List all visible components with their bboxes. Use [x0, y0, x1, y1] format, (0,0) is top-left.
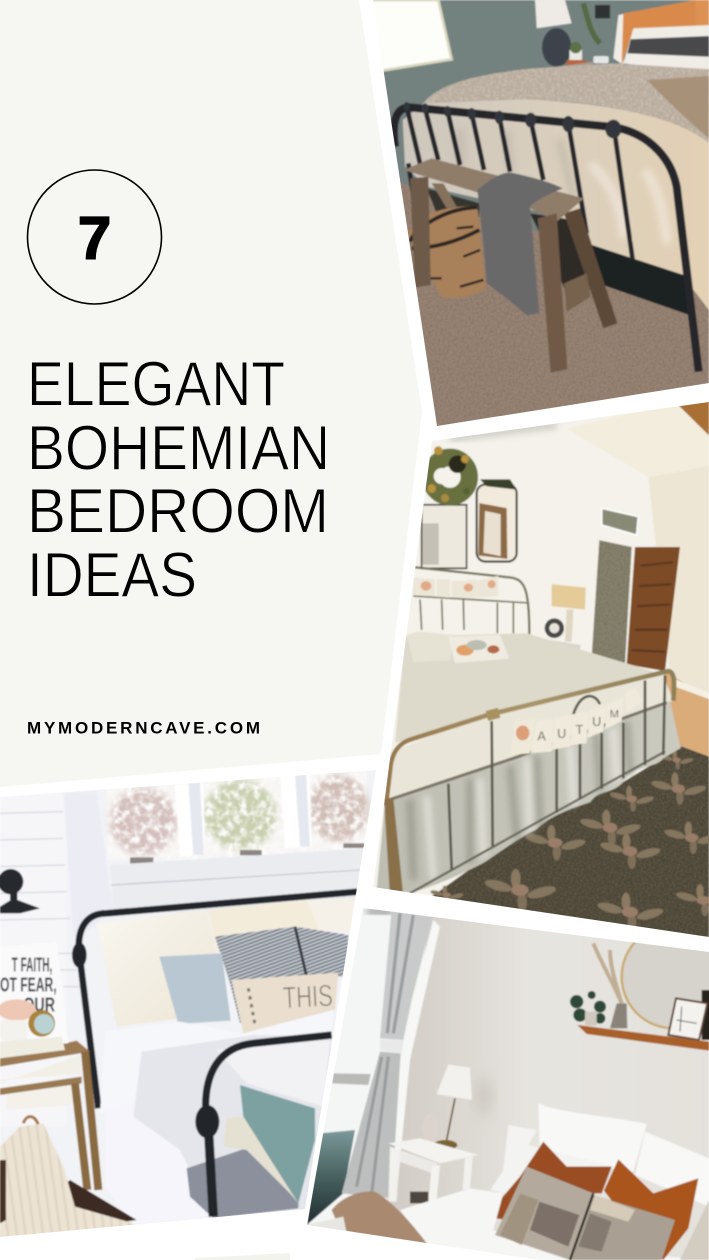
website label: MYMODERNCAVE.COM	[27, 718, 260, 738]
photo: white farmhouse bedroom with black iron bed	[0, 770, 376, 1237]
dark frame panel	[591, 244, 689, 315]
iron footboard	[206, 1035, 332, 1217]
wall sign: OUR	[23, 994, 55, 1017]
title: ELEGANT	[27, 350, 285, 420]
flowers and clock	[0, 999, 65, 1058]
patchwork pillows	[495, 1167, 675, 1260]
quilt	[390, 675, 673, 799]
autumn cards: U	[592, 714, 601, 729]
autumn cards: U	[557, 726, 566, 741]
window with trees	[107, 770, 368, 863]
floor	[67, 1179, 137, 1222]
photo: neutral bedroom with rust and patchwork pillows	[300, 900, 709, 1260]
iron footboard	[394, 107, 699, 372]
wall	[383, 913, 709, 1260]
tan blanket	[332, 1191, 432, 1250]
dried stems and vase	[593, 943, 627, 1028]
bed top	[395, 633, 663, 743]
wall sign: T FAITH,	[12, 954, 52, 977]
plant	[570, 991, 606, 1026]
number badge: 7	[78, 204, 111, 272]
window sill and chair	[307, 1073, 371, 1225]
rug	[427, 746, 709, 937]
photo: brass bed with autumn banner	[370, 400, 709, 937]
wall sconce	[0, 869, 40, 913]
bed skirt	[377, 701, 681, 895]
number badge	[28, 170, 162, 304]
rust pillows	[486, 1142, 698, 1260]
title: BOHEMIAN	[27, 414, 330, 484]
pumpkin banner	[413, 576, 498, 598]
bed linens	[100, 1010, 333, 1225]
headboard	[413, 567, 529, 635]
autumn cards: A	[537, 729, 546, 744]
throw blanket on bed	[422, 63, 709, 143]
wooden shelf	[577, 1025, 709, 1051]
title: IDEAS	[27, 540, 197, 610]
mirrors	[422, 484, 517, 568]
white bedding	[400, 1188, 567, 1260]
autumn cards: M	[610, 709, 619, 721]
floor	[663, 670, 709, 758]
ceiling and right wall	[450, 400, 709, 697]
shiplap wall	[0, 811, 80, 988]
knit blanket in basket	[0, 1117, 133, 1238]
title: BEDROOM	[27, 476, 329, 546]
pillows	[613, 0, 709, 70]
autumn cards	[516, 710, 623, 755]
wall sign	[0, 956, 69, 1045]
table lamp	[423, 1064, 492, 1150]
white nightstand	[388, 1138, 478, 1203]
wall sign: OT FEAR,	[0, 974, 57, 997]
pillows	[407, 632, 509, 663]
lamp and nightstand	[545, 584, 586, 654]
wreath	[427, 446, 470, 502]
duvet	[403, 99, 709, 310]
nightstand	[0, 1041, 98, 1190]
pillows: THIS	[282, 979, 334, 1015]
wooden bench	[403, 158, 617, 373]
brass footboard	[384, 671, 674, 896]
carpet	[393, 180, 709, 430]
pillows	[97, 898, 355, 1033]
sliver of next photo at bottom edge	[195, 1253, 290, 1260]
table lamp	[535, 0, 610, 67]
wall mirror	[622, 925, 709, 1028]
white headboard and pillows	[490, 1103, 709, 1260]
photo: black iron bed with wooden bench	[360, 0, 709, 430]
grey throw on bench	[477, 173, 563, 315]
panel: title background	[0, 0, 422, 787]
picture frames	[668, 990, 709, 1040]
doorway	[592, 508, 680, 671]
autumn cards: T	[575, 722, 583, 737]
headboard	[79, 892, 358, 1108]
basket	[408, 206, 486, 298]
window sill	[111, 849, 363, 886]
title	[27, 350, 330, 610]
curtain	[342, 910, 440, 1198]
